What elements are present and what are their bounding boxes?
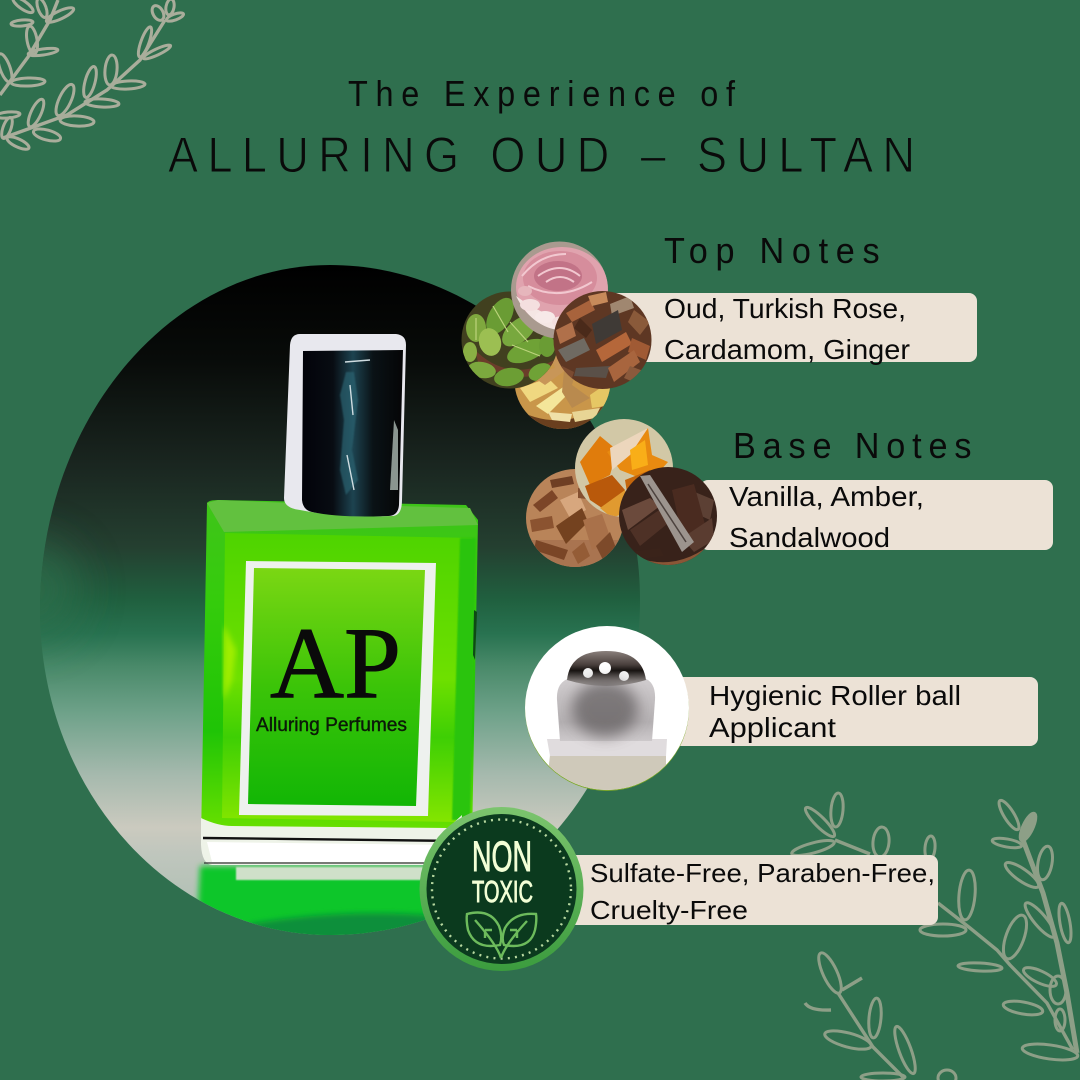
roller label box	[670, 677, 1038, 746]
sulfate-free label box	[565, 855, 938, 925]
side dark band	[452, 538, 476, 820]
title line 2: ALLURING OUD – SULTAN	[168, 128, 915, 184]
badge text: NON	[472, 833, 532, 881]
sulfate-free text: Sulfate-Free, Paraben-Free,	[590, 858, 935, 888]
top notes heading: Top Notes	[664, 231, 880, 271]
top notes label box	[600, 293, 977, 365]
icon: rose	[511, 241, 609, 339]
logo wordmark: Alluring Perfumes	[256, 715, 407, 736]
icon: vanilla pods	[618, 467, 718, 566]
badge text: TOXIC	[472, 874, 533, 909]
title line 1: The Experience of	[348, 74, 735, 114]
sulfate-free text: Cruelty-Free	[590, 895, 748, 925]
icon: base notes ingredient cluster	[526, 419, 718, 570]
badge text	[472, 833, 533, 909]
base notes heading: Base Notes	[733, 426, 971, 466]
label green panel	[248, 568, 425, 806]
glass body	[201, 500, 478, 865]
decorative branch: top-left corner	[0, 0, 184, 152]
top notes text: Cardamom, Ginger	[664, 334, 910, 365]
base notes label box	[700, 480, 1053, 553]
floor reflection	[194, 862, 426, 935]
roller text	[709, 680, 961, 743]
icon: cardamom	[461, 291, 559, 389]
base notes text: Vanilla, Amber,	[729, 481, 924, 512]
sulfate-free text	[590, 858, 935, 925]
icon: sandalwood chips	[526, 469, 624, 570]
icon: ginger	[515, 356, 610, 429]
base notes text	[729, 481, 924, 553]
product photo panel: oval backdrop	[0, 265, 640, 945]
icon: amber	[575, 419, 673, 518]
top notes text	[664, 293, 910, 365]
non toxic badge	[420, 807, 584, 971]
icon: twin leaves	[467, 912, 536, 958]
base notes text: Sandalwood	[729, 522, 890, 553]
top notes text: Oud, Turkish Rose,	[664, 293, 906, 324]
title	[168, 74, 915, 184]
side highlight	[224, 625, 236, 700]
cap	[284, 334, 406, 516]
roller text: Applicant	[709, 712, 836, 743]
icon: top notes ingredient cluster	[461, 241, 653, 430]
decorative branches: bottom-right corner	[790, 793, 1079, 1080]
roller text: Hygienic Roller ball	[709, 680, 961, 711]
clear glass base	[201, 815, 462, 865]
logo AP: AP	[270, 607, 401, 720]
icon: oud wood chips	[553, 291, 653, 389]
label white frame	[239, 561, 436, 816]
perfume bottle	[201, 334, 478, 865]
inner face	[222, 533, 472, 822]
icon: roller ball applicator	[525, 626, 689, 791]
shoulder	[207, 500, 478, 532]
